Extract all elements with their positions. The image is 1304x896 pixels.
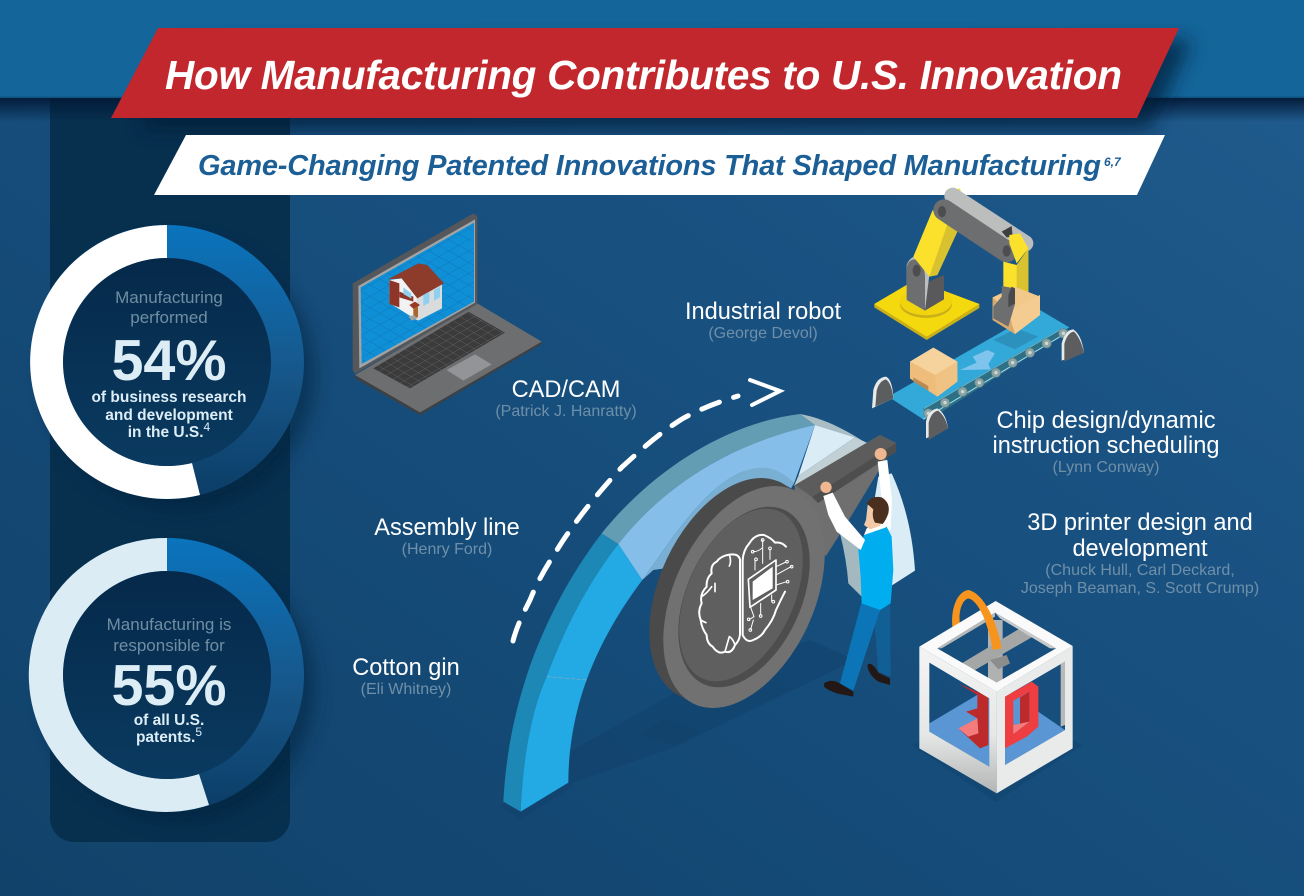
- robot arm lower: [913, 188, 963, 277]
- label: Chip design: instruction scheduling: [993, 433, 1219, 459]
- robot arm forearm: [1003, 233, 1028, 307]
- label: CAD/CAM: (Patrick J. Hanratty): [495, 403, 637, 420]
- raised arm left: [823, 493, 865, 550]
- label: Chip design: (Lynn Conway): [1052, 459, 1160, 476]
- collar: [864, 523, 886, 535]
- donut: 54 percent: 54%: [111, 329, 227, 393]
- conveyor: [888, 310, 1070, 421]
- label: Chip design: Chip design/dynamic: [996, 408, 1216, 434]
- label: Assembly line: [374, 515, 520, 558]
- front leg: [840, 602, 881, 691]
- donut: 54 percent: [30, 225, 315, 510]
- label: Assembly line: (Henry Ford): [402, 541, 492, 558]
- vest: [858, 527, 893, 610]
- top band: [0, 0, 1304, 122]
- robot pedestal: [907, 256, 944, 311]
- raised arm right: [878, 460, 892, 530]
- title banner: [111, 28, 1192, 130]
- dashed progress arrow: [513, 380, 780, 641]
- innovation arch: [503, 414, 868, 812]
- label: Industrial robot: (George Devol): [708, 325, 818, 342]
- head: [864, 497, 889, 529]
- floor shading: [500, 640, 1082, 820]
- label: Cotton gin: [352, 655, 460, 698]
- donut: 55 percent: 5: [195, 725, 202, 739]
- icon: brain and chip: [699, 535, 793, 653]
- donut: 54 percent: and development: [105, 407, 233, 424]
- 3D letters: [958, 682, 1038, 748]
- label: 3D printer: development: [1072, 536, 1208, 562]
- label: Chip design: [993, 408, 1219, 476]
- subtitle banner: [154, 135, 1165, 195]
- label: CAD/CAM: CAD/CAM: [512, 377, 620, 403]
- shoes: [824, 664, 890, 697]
- label: Industrial robot: Industrial robot: [685, 299, 841, 325]
- label: Industrial robot: [685, 299, 841, 342]
- donut: 54 percent: of business research: [91, 389, 247, 406]
- subtitle banner: 6,7: [1104, 155, 1122, 169]
- donut: 55 percent: responsible for: [113, 636, 225, 655]
- label: 3D printer: [1021, 510, 1259, 597]
- gear wheel with handle: [617, 435, 896, 734]
- icon: laptop with CAD house: [353, 213, 542, 415]
- donut: 54 percent: Manufacturing: [115, 288, 223, 307]
- donut: 55 percent: Manufacturing is: [107, 615, 231, 634]
- donut: 55 percent: of all U.S.: [134, 712, 204, 729]
- hands: [820, 448, 887, 493]
- donut: 54 percent: 4: [204, 420, 211, 434]
- label: CAD/CAM: [495, 377, 637, 420]
- panel behind person: [840, 473, 915, 597]
- subtitle banner: Game-Changing Patented Innovations That Shaped Manufacturing: [198, 150, 1101, 182]
- donut: 54 percent: performed: [130, 308, 208, 327]
- box on belt: [910, 348, 957, 397]
- icon: industrial robot and conveyor: [872, 188, 1084, 440]
- person pulling handle: [820, 448, 893, 697]
- box held by gripper: [993, 286, 1040, 334]
- handle arm: [790, 435, 896, 556]
- back leg: [873, 600, 891, 677]
- donut: 55 percent: patents.: [136, 729, 195, 746]
- label: Cotton gin: (Eli Whitney): [361, 681, 451, 698]
- printer frame: [919, 601, 1073, 793]
- filament arc front: [968, 590, 1002, 650]
- filament arc back: [952, 590, 1002, 650]
- left column panel: [50, 98, 290, 842]
- print head gantry: [962, 620, 1034, 683]
- conveyor supports: [872, 329, 1084, 440]
- title banner: How Manufacturing Contributes to U.S. Innovation: [165, 52, 1122, 98]
- label: 3D printer: 3D printer design and: [1027, 510, 1253, 536]
- donut: 55 percent: 55%: [111, 654, 227, 718]
- donut: 55 percent: [29, 538, 315, 823]
- build plate: [929, 683, 1065, 767]
- icon: 3D printer: [919, 590, 1073, 793]
- label: 3D printer: Joseph Beaman, S. Scott Crump): [1021, 580, 1259, 597]
- robot arm upper: [938, 196, 1025, 257]
- label: Cotton gin: Cotton gin: [352, 655, 460, 681]
- label: 3D printer: (Chuck Hull, Carl Deckard,: [1045, 562, 1235, 579]
- label: Assembly line: Assembly line: [374, 515, 520, 541]
- robot base: [874, 280, 979, 340]
- donut: 54 percent: in the U.S.: [128, 424, 204, 441]
